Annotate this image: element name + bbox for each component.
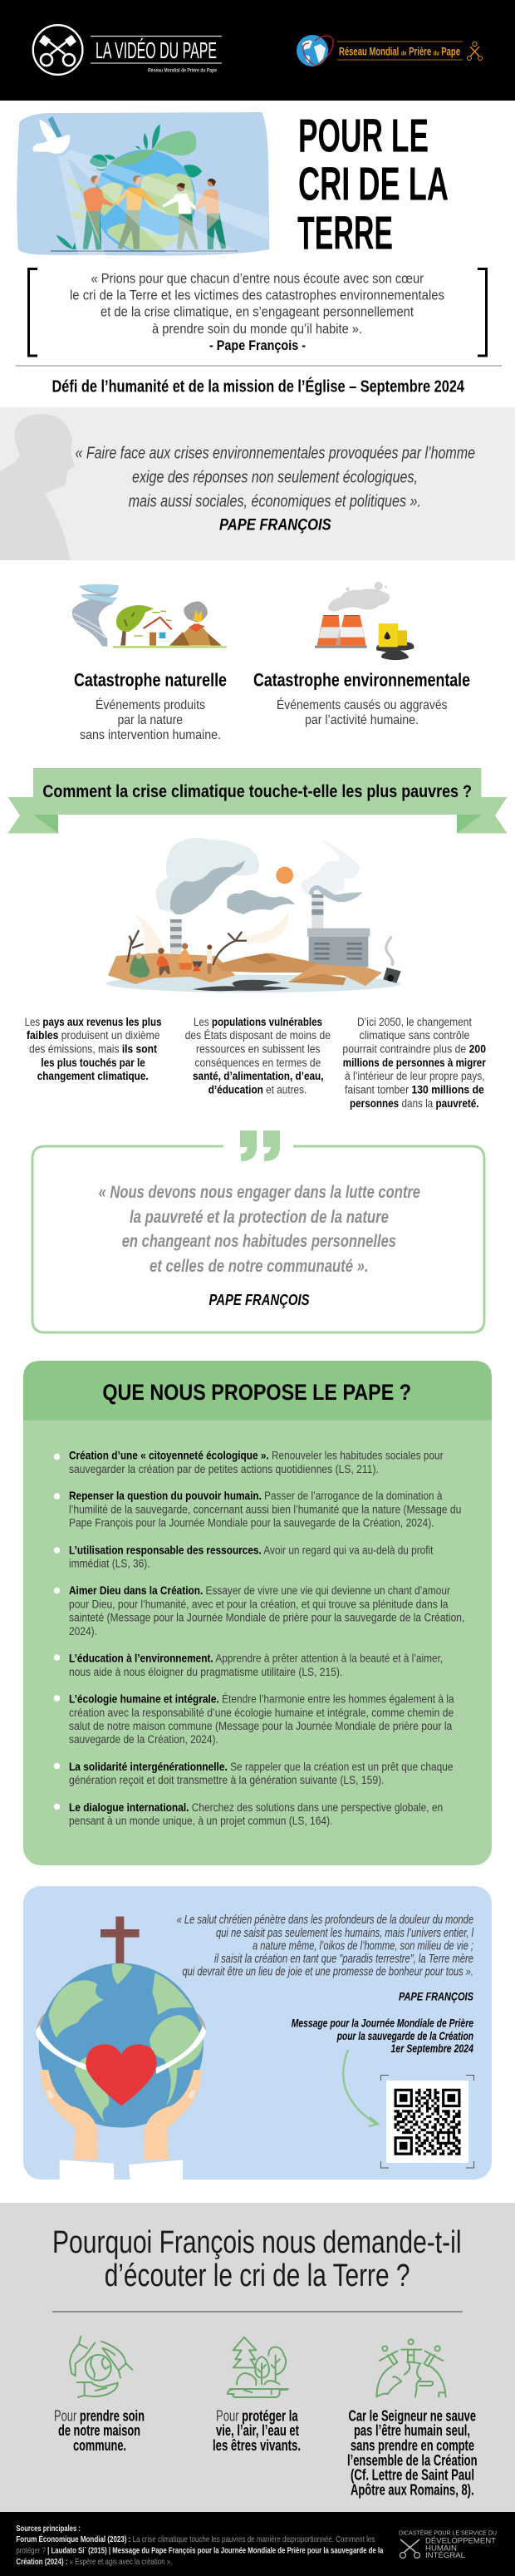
column: vulnerable populations: d’éducation et autres.: [208, 1084, 307, 1096]
sources: Création (2024) : « Espère et agis avec la création ».: [16, 2557, 172, 2567]
dicastery logo: INTÉGRAL: [425, 2551, 465, 2560]
proposal list: pensant à un monde unique, à un projet commun (LS, 164).: [69, 1815, 332, 1827]
proposal list: immédiat (LS, 36).: [69, 1558, 150, 1570]
icon: hands around the planet: [70, 2337, 132, 2397]
column: climate migration: pourrait contraindre plus de 200: [342, 1042, 486, 1056]
panel: outlined quote: la pauvreté et la protection de la nature: [130, 1208, 389, 1227]
panel: Pope quote on grey band: mais aussi sociales, économiques et politiques ».: [129, 492, 421, 510]
proposal list: Repenser la question du pouvoir humain. Passer de l’arrogance de la domination à: [69, 1490, 443, 1502]
proposal list: sauvegarder la création par de petites actions quotidiennes (LS, 211).: [69, 1463, 379, 1475]
leaves: [135, 124, 160, 150]
panel: what the Pope proposes: [23, 1361, 492, 1865]
person 1: [83, 175, 114, 250]
logo: Réseau Mondial de Prière du Pape: [297, 35, 482, 66]
column: lowest income countries: faibles produisent un dixième: [27, 1029, 159, 1042]
disaster descriptions: sans intervention humaine.: [80, 728, 221, 742]
panel: outlined quote: [32, 1130, 484, 1332]
disaster descriptions: Événements produits: [96, 698, 205, 712]
panel: World Day of Prayer message: [23, 1886, 492, 2180]
dove: [32, 116, 70, 154]
proposal list: [69, 1450, 464, 1827]
proposal list: création avec la responsabilité d’une écologie humaine et intégrale, comme chemin de: [69, 1707, 454, 1719]
proposal list: Pape François pour la Journée Mondiale pour la sauvegarde de la Création, 2024).: [69, 1517, 434, 1529]
header band: [0, 0, 515, 101]
column: vulnerable populations: ressources en subissent les: [196, 1042, 321, 1056]
ribbon heading: [8, 768, 507, 833]
reasons text: de notre maison: [58, 2422, 140, 2439]
icon: quotation mark: [240, 1130, 280, 1161]
proposal list: 2024).: [69, 1625, 97, 1638]
reasons text: pas l’être humain seul,: [354, 2422, 470, 2439]
proposal list: L’écologie humaine et intégrale. Étendre l’harmonie entre les hommes également à la: [69, 1693, 454, 1706]
column: vulnerable populations: santé, d’alimentation, d’eau,: [193, 1070, 324, 1082]
column: vulnerable populations: [185, 1016, 331, 1096]
panel: Pope quote on grey band: exige des réponses non seulement écologiques,: [132, 469, 418, 487]
column: climate migration: D’ici 2050, le changement: [357, 1016, 472, 1028]
proposal list: salut de notre maison commune (Message pour la Journée Mondiale de prière pour la: [69, 1720, 453, 1732]
oil barrel: [383, 937, 401, 983]
illustration: environmental disasters: [315, 582, 414, 660]
illustration: hands holding Earth with cross and heart: [36, 1917, 206, 2180]
panel: outlined quote: « Nous devons nous engager dans la lutte contre: [99, 1183, 420, 1202]
title: POUR LE: [298, 110, 429, 163]
disaster descriptions: Catastrophe environnementale: [253, 670, 470, 691]
panel: Pope quote on grey band: PAPE FRANÇOIS: [219, 517, 331, 534]
arrow to QR code: [343, 2050, 378, 2126]
prayer intention quote with brackets: « Prions pour que chacun d’entre nous écoute avec son cœur: [91, 271, 424, 287]
prayer intention quote with brackets: et de la crise climatique, en s’engageant personnellement: [101, 304, 414, 320]
factory: [307, 928, 370, 967]
land: [108, 953, 382, 986]
footer: sources and dicastery logo: [0, 2512, 515, 2576]
panel: outlined quote: PAPE FRANÇOIS: [209, 1292, 309, 1308]
Pope's quotation and source: [177, 1914, 474, 2055]
proposal list: nous aide à nous éloigner du pragmatisme utilitaire (LS, 215).: [69, 1666, 342, 1678]
illustration: pollution and poverty landscape: [106, 838, 401, 992]
reasons text: [54, 2408, 477, 2499]
reasons text: Pour protéger la: [216, 2408, 298, 2425]
sources: Forum Économique Mondial (2023) : La crise climatique touche les pauvres de manière disproportionnée. Comment les: [16, 2534, 375, 2544]
Pope's quotation and source: 1er Septembre 2024: [390, 2042, 473, 2055]
disaster descriptions: [74, 670, 470, 742]
title: [297, 110, 449, 259]
column: vulnerable populations: conséquences en termes de: [194, 1057, 321, 1069]
panel: what the Pope proposes: QUE NOUS PROPOSE LE PAPE ?: [102, 1380, 411, 1405]
dicastery logo: HUMAIN: [425, 2544, 457, 2554]
icon: Pope silhouette: [0, 414, 75, 560]
logo: La Vidéo du Pape: LA VIDÉO DU PAPE: [96, 37, 217, 63]
smoke: [156, 838, 363, 914]
continents: [48, 1963, 203, 2124]
disaster descriptions: Événements causés ou aggravés: [277, 698, 448, 712]
disaster descriptions: Catastrophe naturelle: [74, 670, 227, 691]
bullets: [54, 1454, 60, 1810]
reasons text: (Cf. Lettre de Saint Paul: [351, 2467, 474, 2484]
proposal list: pour Dieu, pour l’humanité, avec et pour la création, et qui trouve sa plénitude dans la: [69, 1598, 449, 1610]
proposal list: Création d’une « citoyenneté écologique ». Renouveler les habitudes sociales pour: [69, 1450, 444, 1461]
reasons text: les êtres vivants.: [213, 2437, 301, 2454]
logo: La Vidéo du Pape: Réseau Mondial de Prière du Pape: [148, 68, 217, 73]
faint warm smoke: [135, 912, 288, 953]
disaster descriptions: par la nature: [118, 713, 183, 727]
hands: [40, 2070, 98, 2160]
chimneys: [170, 894, 323, 954]
dead trees: [127, 931, 246, 964]
column: lowest income countries: changement climatique.: [37, 1070, 149, 1082]
prayer intention quote with brackets: le cri de la Terre et les victimes des catastrophes environnementales: [70, 288, 444, 303]
panel: outlined quote: et celles de notre communauté ».: [150, 1257, 369, 1276]
disaster descriptions: par l’activité humaine.: [305, 713, 419, 727]
proposal list: génération reçoit et doit transmettre à la génération suivante (LS, 159).: [69, 1774, 384, 1786]
person 2: [115, 175, 158, 249]
icon: people on the globe: [376, 2339, 446, 2396]
dicastery logo: DÉVELOPPEMENT: [425, 2537, 496, 2546]
panel: outlined quote: en changeant nos habitudes personnelles: [122, 1232, 396, 1251]
column: climate migration: millions de personnes à migrer: [343, 1057, 486, 1069]
illustration: natural disasters: [72, 584, 227, 647]
Pope's quotation and source: PAPE FRANÇOIS: [399, 1990, 474, 2003]
column: lowest income countries: Les pays aux revenus les plus: [25, 1016, 161, 1028]
proposal list: l’humilité de la sauvegarde, concernant aussi bien l’humanité que la nature (Message du: [69, 1503, 461, 1515]
column: climate migration: personnes dans la pauvreté.: [350, 1097, 478, 1110]
column: climate migration: climatique sans contrôle: [359, 1029, 469, 1042]
proposal list: sainteté (Message pour la Journée Mondiale de prière pour la sauvegarde de la Création,: [69, 1612, 464, 1624]
sources: Sources principales :: [16, 2524, 81, 2534]
reasons text: Pour prendre soin: [54, 2408, 145, 2425]
title: TERRE: [297, 206, 393, 259]
column: climate migration: à l’intérieur de leur propre pays,: [345, 1070, 485, 1082]
QR code: [380, 2075, 473, 2168]
three facts columns: [25, 1016, 486, 1110]
column: lowest income countries: des émissions, mais ils sont: [29, 1042, 157, 1056]
reasons text: vie, l’air, l’eau et: [216, 2422, 299, 2439]
proposal list: sauvegarde de la Création, 2024).: [69, 1733, 218, 1746]
dicastery logo: [399, 2529, 497, 2560]
family around the fire: [130, 943, 213, 978]
icon: forest: [228, 2337, 288, 2397]
prayer intention quote with brackets: - Pape François -: [209, 337, 306, 353]
person 4: [195, 179, 226, 249]
light rays: [58, 150, 268, 256]
panel: Pope quote on grey band: [0, 407, 515, 560]
column: climate migration: [342, 1016, 486, 1110]
column: climate migration: faisant tomber 130 millions de: [345, 1084, 484, 1096]
column: lowest income countries: [25, 1016, 161, 1082]
proposal list: Le dialogue international. Cherchez des solutions dans une perspective globale, en: [69, 1801, 443, 1814]
person 3: [162, 183, 199, 249]
water: [106, 975, 400, 992]
logo: Réseau Mondial de Prière du Pape: Réseau Mondial de Prière du Pape: [339, 45, 460, 58]
proposal list: L’utilisation responsable des ressources. Avoir un regard qui va au-delà du profit: [69, 1544, 434, 1556]
cuffs: [60, 2160, 183, 2180]
proposal list: L’éducation à l’environnement. Apprendre à prêter attention à la beauté et à l’aimer,: [69, 1652, 443, 1665]
hero illustration: people holding hands around the Earth: [17, 112, 269, 256]
sources: protéger ? | Laudato Si´ (2015) | Message du Pape François pour la Journée Mondiale de Prière pour la sauvegarde de la: [16, 2546, 384, 2556]
reasons text: commune.: [73, 2437, 126, 2454]
column: vulnerable populations: des États disposant de moins de: [185, 1029, 331, 1042]
prayer intention quote with brackets: à prendre soin du monde qu’il habite ».: [152, 321, 362, 337]
proposal list: La solidarité intergénérationnelle. Se rappeler que la création est un prêt que chaque: [69, 1761, 454, 1773]
column: lowest income countries: les plus touchés par le: [41, 1057, 145, 1069]
prayer intention quote with brackets: [28, 269, 487, 356]
panel: why Francis asks us to listen: d’écouter le cri de la Terre ?: [105, 2258, 410, 2293]
logo: La Vidéo du Pape: [33, 25, 222, 75]
proposal list: Aimer Dieu dans la Création. Essayer de vivre une vie qui devienne un chant d’amour: [69, 1584, 450, 1597]
sources: [16, 2524, 384, 2567]
panel: why Francis asks us to listen: [0, 2203, 515, 2512]
dicastery logo: DICASTÈRE POUR LE SERVICE DU: [399, 2529, 497, 2536]
column: vulnerable populations: Les populations vulnérables: [194, 1016, 322, 1028]
